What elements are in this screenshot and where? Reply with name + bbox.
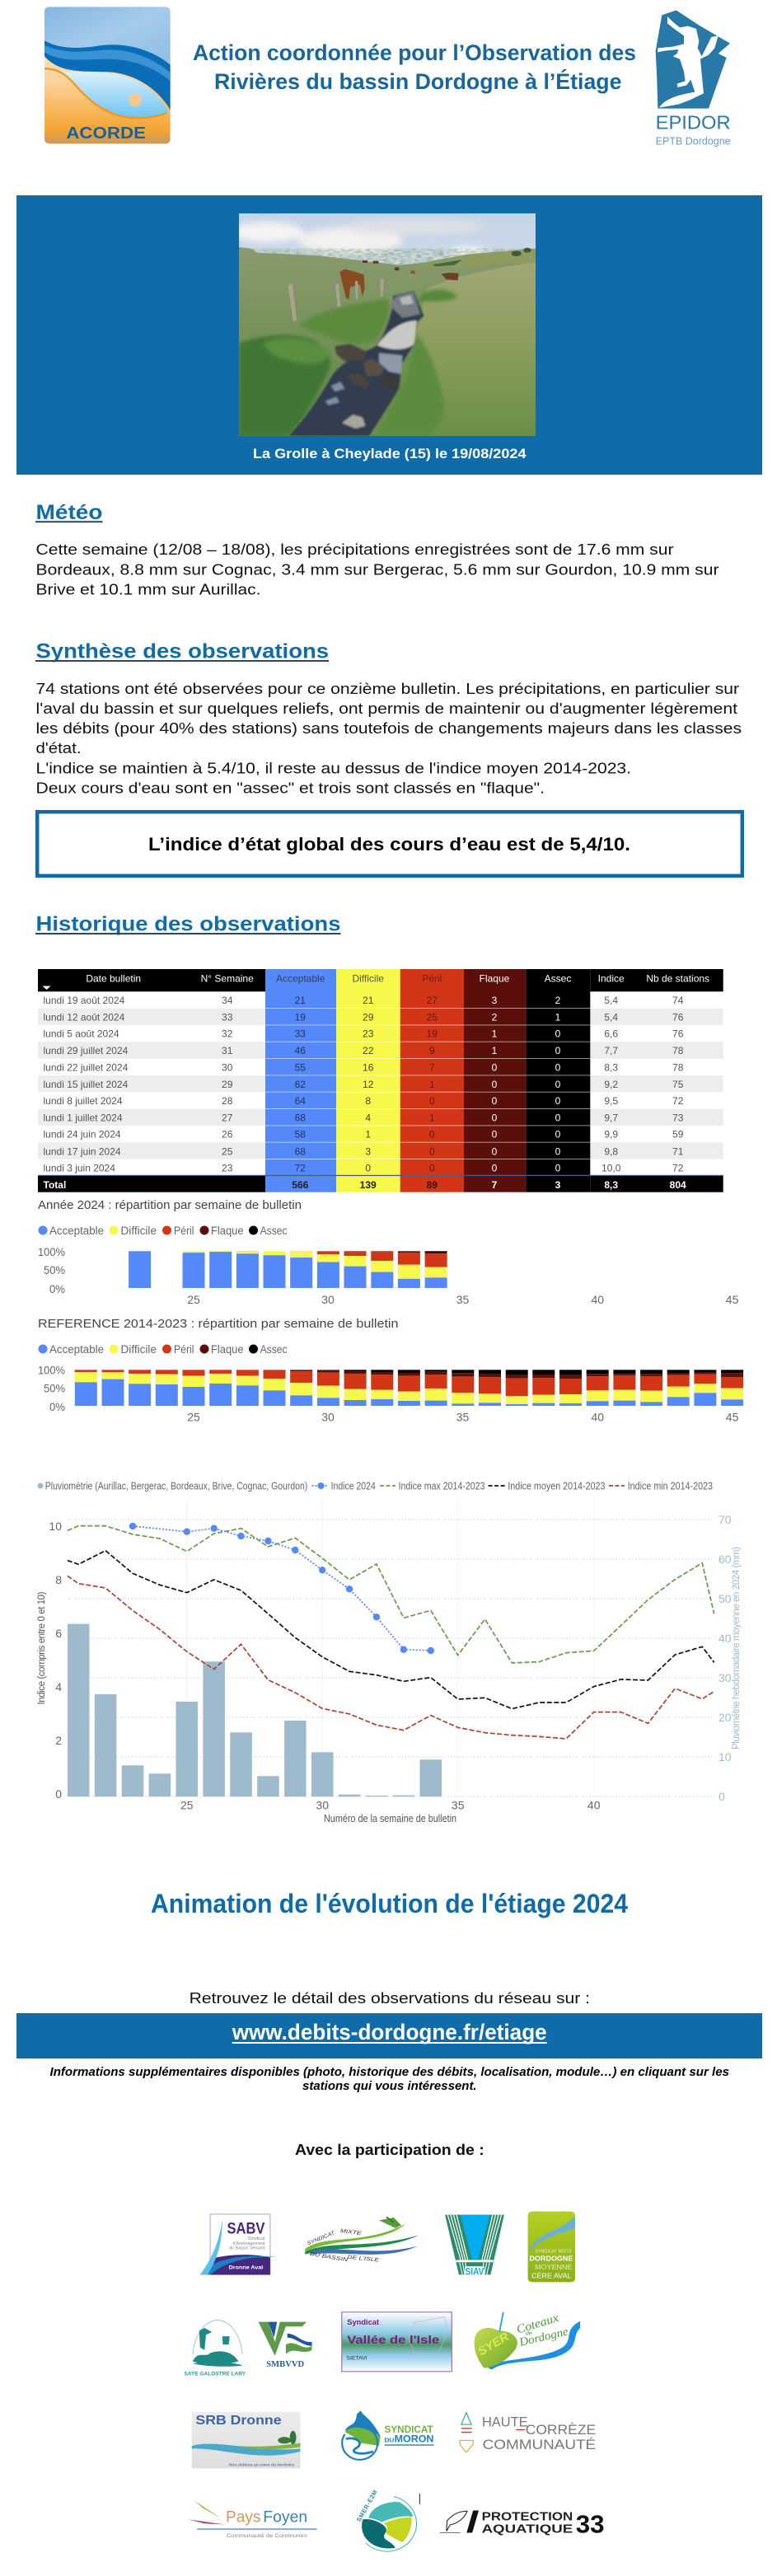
table rows: 1 — [365, 1129, 371, 1140]
table header: Acceptable — [276, 972, 325, 984]
logo: Pays Foyen: Pays — [226, 2508, 260, 2527]
logo: syndicat mixte du bassin de l'Isle: SYNDICAT — [307, 2230, 336, 2246]
left axis: 4 — [55, 1680, 62, 1693]
left axis: Indice (compris entre 0 et 10) — [37, 1591, 47, 1704]
table rows: 33 — [222, 1012, 233, 1023]
table rows: 68 — [295, 1112, 306, 1123]
header logo: ACORDE: ACORDE — [66, 124, 146, 143]
logo: SIAV: SIAV — [465, 2266, 484, 2278]
heading: Météo: Météo — [36, 501, 102, 524]
table rows: 64 — [295, 1095, 306, 1107]
table total row: 566 — [292, 1179, 309, 1191]
table rows: 1 — [429, 1112, 435, 1123]
table rows: 78 — [672, 1061, 684, 1073]
chart legend: Pluviométrie (Aurillac, Bergerac, Bordeaux, Brive, Cognac, Gourdon) — [45, 1480, 307, 1492]
text block: synthèse: Deux cours d'eau sont en "assec" et trois sont classés en "flaque". — [36, 780, 545, 796]
logo: Saye Galostre Lary: SAYE GALOSTRE LARY — [184, 2372, 246, 2377]
chart legend — [38, 1480, 713, 1492]
table rows: 0 — [555, 1079, 561, 1090]
axis labels — [38, 1363, 65, 1413]
logo: syndicat mixte du bassin de l'Isle: DE L'ISLE — [347, 2255, 380, 2264]
logo: Syndicat du Moron: SYNDICAT — [384, 2424, 433, 2435]
logo: SYER Coteaux de Dordogne: SYER — [475, 2330, 512, 2358]
table rows: lundi 24 juin 2024 — [43, 1129, 121, 1140]
table rows: 5,4 — [604, 995, 618, 1006]
legend: 2024 — [38, 1225, 288, 1237]
logo: SMER-E2M: SMER-E2M — [355, 2489, 379, 2523]
table rows: lundi 8 juillet 2024 — [43, 1095, 123, 1107]
logo: Saye Galostre Lary — [184, 2321, 246, 2377]
logo: Syndicat du Moron: MORON — [395, 2433, 433, 2445]
heading: animation: Animation de l'évolution de l'étiage 2024 — [151, 1889, 628, 1918]
table rows: 74 — [672, 995, 684, 1006]
table rows: 0 — [492, 1095, 498, 1107]
logo: SABV — [200, 2214, 277, 2274]
line: indice max — [68, 1526, 714, 1663]
table total row: 139 — [360, 1179, 377, 1191]
table rows: 0 — [555, 1028, 561, 1040]
table rows: 0 — [429, 1162, 435, 1173]
chart: année 2024 répartition: 40 — [592, 1293, 604, 1306]
logo: SABV: Dronne Aval — [229, 2265, 263, 2271]
text block: météo: Brive et 10.1 mm sur Aurillac. — [36, 582, 260, 598]
header logo: ACORDE — [44, 7, 171, 143]
banner: lien débits: www.debits-dordogne.fr/etiage — [232, 2020, 547, 2044]
table rows: 29 — [363, 1012, 374, 1023]
callout: indice global — [37, 812, 742, 876]
logo: Pays Foyen — [188, 2500, 317, 2539]
logo: Protection Aquatique 33 — [440, 2509, 605, 2538]
table rows: 9,9 — [604, 1129, 618, 1140]
chart: référence 2014-2023 répartition: 45 — [726, 1411, 739, 1424]
text block: synthèse: d'état. — [36, 740, 81, 756]
rainfall bars — [68, 1624, 442, 1796]
logo: Protection Aquatique 33: AQUATIQUE — [482, 2522, 573, 2536]
logo: Haute-Corrèze Communauté: HAUTE — [482, 2414, 528, 2429]
chart: année 2024 répartition: 35 — [456, 1293, 469, 1306]
logo: Dordogne moyenne Cère aval: DORDOGNE — [530, 2255, 573, 2262]
legend: 2024: Assec — [260, 1225, 288, 1237]
logo: SABV: d'Aménagement — [232, 2241, 265, 2246]
right axis: Pluviométrie hebdomadaire moyenne en 2024 (mm) — [732, 1547, 742, 1749]
table rows: 76 — [672, 1012, 684, 1023]
table rows: 1 — [492, 1028, 498, 1040]
logo: SRB Dronne — [192, 2412, 301, 2468]
table rows: lundi 22 juillet 2024 — [43, 1061, 129, 1073]
table rows: 2 — [492, 1012, 498, 1023]
table rows: 29 — [222, 1079, 233, 1090]
table rows: 12 — [363, 1079, 374, 1090]
right axis: 60 — [718, 1553, 732, 1566]
table total row: Total — [43, 1179, 66, 1191]
table rows: 58 — [295, 1129, 306, 1140]
left axis: 8 — [55, 1573, 62, 1586]
logos: partenaires — [184, 2212, 605, 2551]
chart: année 2024 répartition: 30 — [321, 1293, 335, 1306]
logo: Dordogne moyenne Cère aval: SYNDICAT MIXTE — [535, 2250, 573, 2254]
logo: Vallée de l'Isle: Vallée de l'Isle — [347, 2334, 439, 2347]
left axis — [37, 1520, 62, 1801]
line: indice min — [68, 1576, 714, 1739]
table rows: 34 — [222, 995, 233, 1006]
table rows: 0 — [492, 1162, 498, 1173]
left axis: 6 — [55, 1627, 62, 1640]
text block: synthèse: l'aval du bassin et sur quelques reliefs, ont permis de maintenir ou d'augmenter légèrement — [36, 700, 737, 717]
logo: Dordogne moyenne Cère aval — [528, 2212, 575, 2282]
table rows: 0 — [365, 1162, 371, 1173]
logo: Vallée de l'Isle: Syndicat — [347, 2318, 379, 2326]
table rows: 3 — [492, 995, 498, 1006]
logo: Vallée de l'Isle — [342, 2312, 452, 2372]
right axis: 30 — [718, 1671, 732, 1684]
table rows: 9,2 — [604, 1079, 618, 1090]
chart: référence 2014-2023 répartition: 35 — [456, 1411, 469, 1424]
table total row: 7 — [492, 1179, 498, 1191]
logo: SABV: Syndicat — [248, 2236, 265, 2241]
table header — [43, 972, 709, 990]
table rows: 0 — [492, 1061, 498, 1073]
chart: année 2024 répartition: 25 — [187, 1293, 200, 1306]
chart legend: Indice moyen 2014-2023 — [508, 1480, 605, 1492]
table total row: 89 — [427, 1179, 438, 1191]
title: Rivières du bassin Dordogne à l’Étiage — [214, 68, 621, 94]
table total row: 804 — [670, 1179, 686, 1191]
legend: référence: Péril — [174, 1343, 194, 1356]
logo: Vallée de l'Isle: SIETAVI — [347, 2356, 367, 2361]
table total row — [43, 1179, 686, 1191]
text block: synthèse: les débits (pour 40% des stations) sans toutefois de changements majeurs dans les classes — [36, 720, 742, 737]
right axis: 0 — [718, 1790, 725, 1803]
x axis: 40 — [587, 1798, 601, 1811]
title: Action coordonnée pour l’Observation des — [193, 40, 636, 65]
table rows: 0 — [429, 1129, 435, 1140]
right axis: 20 — [718, 1711, 732, 1724]
legend: 2024: Flaque — [211, 1225, 244, 1237]
stacked bars 2024 — [129, 1251, 447, 1288]
table rows: 1 — [429, 1079, 435, 1090]
stacked bars référence — [75, 1370, 743, 1406]
x axis: 30 — [316, 1798, 329, 1811]
chart: année 2024 répartition: 45 — [726, 1293, 739, 1306]
table total row: 3 — [555, 1179, 561, 1191]
text block: météo: Bordeaux, 8.8 mm sur Cognac, 3.4 mm sur Bergerac, 5.6 mm sur Gourdon, 10.9 mm sur — [36, 562, 718, 578]
table rows: 1 — [492, 1045, 498, 1056]
title — [193, 40, 636, 94]
logo: SMBVVD — [259, 2322, 312, 2369]
table rows: 0 — [492, 1129, 498, 1140]
table rows: 8,3 — [604, 1061, 618, 1073]
logo: syndicat mixte du bassin de l'Isle — [305, 2217, 419, 2264]
table rows: 72 — [672, 1162, 684, 1173]
table rows: 32 — [222, 1028, 233, 1040]
table rows: 22 — [363, 1045, 374, 1056]
right axis: 70 — [718, 1513, 732, 1526]
table rows: 9,5 — [604, 1095, 618, 1107]
logo: Pays Foyen: Communauté de Communes — [227, 2533, 307, 2539]
header logo: EPIDOR: EPTB Dordogne — [656, 136, 731, 148]
table rows: lundi 19 août 2024 — [43, 995, 125, 1006]
logo: Pays Foyen: Foyen — [263, 2508, 307, 2527]
legend: référence: Assec — [260, 1343, 288, 1356]
chart legend: Indice 2024 — [331, 1480, 376, 1492]
logo: SYER Coteaux de Dordogne: Coteaux — [515, 2311, 560, 2336]
table rows: 10,0 — [601, 1162, 621, 1173]
text block: synthèse: L'indice se maintien à 5.4/10, il reste au dessus de l'indice moyen 2014-2023. — [36, 760, 631, 776]
left axis: 0 — [55, 1787, 62, 1801]
logo: Protection Aquatique 33: PROTECTION — [482, 2510, 573, 2524]
logo: Haute-Corrèze Communauté: CORRÈZE — [526, 2421, 596, 2438]
table rows: 78 — [672, 1045, 684, 1056]
chart: année 2024 répartition: Année 2024 : répartition par semaine de bulletin — [38, 1199, 302, 1212]
table rows: 19 — [295, 1012, 306, 1023]
axis labels: 50% — [44, 1381, 65, 1394]
table rows: 59 — [672, 1129, 684, 1140]
legend: référence: Acceptable — [49, 1343, 104, 1356]
text block: météo — [36, 541, 718, 598]
logo: SYER Coteaux de Dordogne — [475, 2311, 580, 2369]
table rows: 5,4 — [604, 1012, 618, 1023]
table rows: 33 — [295, 1028, 306, 1040]
logo: SABV: SABV — [227, 2220, 265, 2237]
table rows: 30 — [222, 1061, 233, 1073]
table rows: 25 — [222, 1145, 233, 1157]
axis labels — [38, 1245, 65, 1295]
table header: Difficile — [352, 972, 384, 984]
table rows: 28 — [222, 1095, 233, 1107]
table rows: 25 — [427, 1012, 438, 1023]
table rows: lundi 17 juin 2024 — [43, 1145, 121, 1157]
axis labels: 0% — [49, 1400, 65, 1413]
table rows: 72 — [295, 1162, 306, 1173]
table rows: 0 — [492, 1112, 498, 1123]
logo: SMER-E2M — [355, 2489, 420, 2551]
panel: photo banner — [16, 195, 762, 475]
x axis: 25 — [180, 1798, 194, 1811]
table rows: lundi 3 juin 2024 — [43, 1162, 115, 1173]
logo: syndicat mixte du bassin de l'Isle: MIXTE — [339, 2228, 363, 2236]
logo: SRB Dronne: SRB Dronne — [195, 2414, 282, 2428]
logo: Haute-Corrèze Communauté: COMMUNAUTÉ — [483, 2436, 596, 2452]
axis labels: 100% — [38, 1245, 65, 1258]
logo: Dordogne moyenne Cère aval: CÈRE AVAL — [531, 2272, 572, 2280]
table rows: 0 — [492, 1079, 498, 1090]
table rows: lundi 1 juillet 2024 — [43, 1112, 123, 1123]
table rows: 68 — [295, 1145, 306, 1157]
legend: 2024: Difficile — [120, 1225, 157, 1237]
table rows: 2 — [555, 995, 561, 1006]
table rows: 9 — [429, 1045, 435, 1056]
right axis — [718, 1513, 742, 1803]
right axis: 10 — [718, 1750, 732, 1763]
table header: Date bulletin — [86, 972, 141, 984]
text block: synthèse: 74 stations ont été observées pour ce onzième bulletin. Les précipitations, en particulier sur — [36, 681, 739, 697]
table rows: 0 — [429, 1145, 435, 1157]
table rows: 8 — [365, 1095, 371, 1107]
table rows: 3 — [365, 1145, 371, 1157]
table rows: 19 — [427, 1028, 438, 1040]
table rows: 7 — [429, 1061, 435, 1073]
table rows: 0 — [555, 1145, 561, 1157]
logo: SYER Coteaux de Dordogne: de — [526, 2331, 532, 2336]
banner: lien débits — [16, 2013, 762, 2058]
table rows: 7,7 — [604, 1045, 618, 1056]
chart: référence 2014-2023 répartition: 40 — [592, 1411, 604, 1424]
table header: Nb de stations — [646, 972, 709, 984]
callout: indice global: L’indice d’état global des cours d’eau est de 5,4/10. — [148, 834, 630, 855]
table rows: 27 — [427, 995, 438, 1006]
logo: SRB Dronne: Nos rivières au cœur du territoire — [229, 2463, 294, 2468]
x axis: 35 — [452, 1798, 465, 1811]
legend: référence — [38, 1343, 288, 1356]
table rows: 9,7 — [604, 1112, 618, 1123]
table header: Péril — [422, 972, 442, 984]
heading: Historique des observations: Historique des observations — [36, 913, 341, 936]
table rows: 0 — [492, 1145, 498, 1157]
table rows: 0 — [555, 1045, 561, 1056]
photo caption: La Grolle à Cheylade (15) le 19/08/2024 — [253, 447, 527, 461]
table rows: 4 — [365, 1112, 371, 1123]
table rows: 16 — [363, 1061, 374, 1073]
table rows: 0 — [555, 1061, 561, 1073]
logo: SMBVVD: SMBVVD — [266, 2360, 305, 2369]
table rows — [43, 995, 684, 1173]
table rows: 26 — [222, 1129, 233, 1140]
header logo: EPIDOR — [656, 10, 731, 148]
right axis: 50 — [718, 1592, 732, 1605]
heading: Synthèse des observations: Synthèse des observations — [36, 639, 329, 663]
text: retrouvez: Retrouvez le détail des observations du réseau sur : — [190, 1990, 590, 2007]
logo: SYER Coteaux de Dordogne: Dordogne — [517, 2325, 570, 2349]
left axis: 2 — [55, 1734, 62, 1747]
text block: synthèse — [36, 681, 742, 796]
table rows: lundi 29 juillet 2024 — [43, 1045, 129, 1056]
table rows: 6,6 — [604, 1028, 618, 1040]
table rows: 0 — [429, 1095, 435, 1107]
chart: référence 2014-2023 répartition: 25 — [187, 1411, 200, 1424]
heading: participation: Avec la participation de : — [295, 2142, 484, 2158]
table rows: 1 — [555, 1012, 561, 1023]
logo: Dordogne moyenne Cère aval: MOYENNE — [535, 2263, 573, 2271]
table rows: 46 — [295, 1045, 306, 1056]
table rows: 62 — [295, 1079, 306, 1090]
chart: référence 2014-2023 répartition: 30 — [321, 1411, 335, 1424]
photo: La Grolle à Cheylade — [232, 213, 536, 436]
table rows: lundi 15 juillet 2024 — [43, 1079, 129, 1090]
axis labels: 0% — [49, 1282, 65, 1295]
table rows: 0 — [555, 1129, 561, 1140]
table rows: 21 — [295, 995, 306, 1006]
table rows: 55 — [295, 1061, 306, 1073]
line: indice moyen — [68, 1551, 714, 1709]
table rows: 9,8 — [604, 1145, 618, 1157]
chart legend: Indice min 2014-2023 — [628, 1480, 713, 1492]
logo: Syndicat du Moron — [335, 2410, 433, 2466]
table rows: 76 — [672, 1028, 684, 1040]
table: historique des bulletins — [38, 969, 723, 1192]
table rows: 75 — [672, 1079, 684, 1090]
logo: SABV: du Bassin Versant — [229, 2246, 265, 2251]
x axis — [180, 1798, 601, 1824]
chart: année 2024 répartition — [38, 1199, 739, 1306]
table rows: 31 — [222, 1045, 233, 1056]
axis labels: 100% — [38, 1363, 65, 1376]
table rows: 0 — [555, 1162, 561, 1173]
text: informations supplémentaires: Informations supplémentaires disponibles (photo, historique des débits, localisation, module…) en cliquant sur les — [49, 2065, 729, 2079]
chart: référence 2014-2023 répartition: REFERENCE 2014-2023 : répartition par semaine de bulletin — [38, 1318, 399, 1331]
logo: Haute-Corrèze Communauté — [460, 2413, 596, 2452]
x axis: Numéro de la semaine de bulletin — [324, 1812, 456, 1824]
table rows: 72 — [672, 1095, 684, 1107]
table rows: 23 — [222, 1162, 233, 1173]
header logo: EPIDOR: EPIDOR — [656, 112, 731, 133]
text block: météo: Cette semaine (12/08 – 18/08), les précipitations enregistrées sont de 17.6 mm sur — [36, 541, 674, 558]
axis labels: 50% — [44, 1263, 65, 1276]
table rows: 71 — [672, 1145, 684, 1157]
table header: Assec — [545, 972, 571, 984]
line: indice 2024 — [129, 1523, 434, 1654]
table rows: 27 — [222, 1112, 233, 1123]
table rows: lundi 5 août 2024 — [43, 1028, 119, 1040]
table header: N° Semaine — [201, 972, 254, 984]
table total row: 8,3 — [604, 1179, 618, 1191]
logo: Protection Aquatique 33: 33 — [576, 2509, 605, 2538]
logo: Syndicat du Moron: DU — [384, 2437, 395, 2444]
table rows: 73 — [672, 1112, 684, 1123]
text: informations supplémentaires: stations qui vous intéressent. — [302, 2079, 477, 2093]
right axis: 40 — [718, 1632, 732, 1645]
chart legend: Indice max 2014-2023 — [399, 1480, 484, 1492]
table rows: 0 — [555, 1112, 561, 1123]
chart: indice et pluviométrie — [37, 1480, 742, 1824]
legend: référence: Difficile — [120, 1343, 157, 1356]
text: informations supplémentaires — [49, 2065, 729, 2093]
legend: 2024: Péril — [174, 1225, 194, 1237]
left axis: 10 — [49, 1520, 62, 1533]
legend: référence: Flaque — [211, 1343, 244, 1356]
table rows: 21 — [363, 995, 374, 1006]
logo: SIAV — [445, 2215, 504, 2278]
table rows: 23 — [363, 1028, 374, 1040]
table rows: lundi 12 août 2024 — [43, 1012, 125, 1023]
table header: Flaque — [480, 972, 510, 984]
logo: syndicat mixte du bassin de l'Isle: DU BASSIN — [309, 2251, 349, 2263]
legend: 2024: Acceptable — [49, 1225, 104, 1237]
chart: référence 2014-2023 répartition — [38, 1318, 743, 1424]
table rows: 0 — [555, 1095, 561, 1107]
table header: Indice — [598, 972, 625, 984]
